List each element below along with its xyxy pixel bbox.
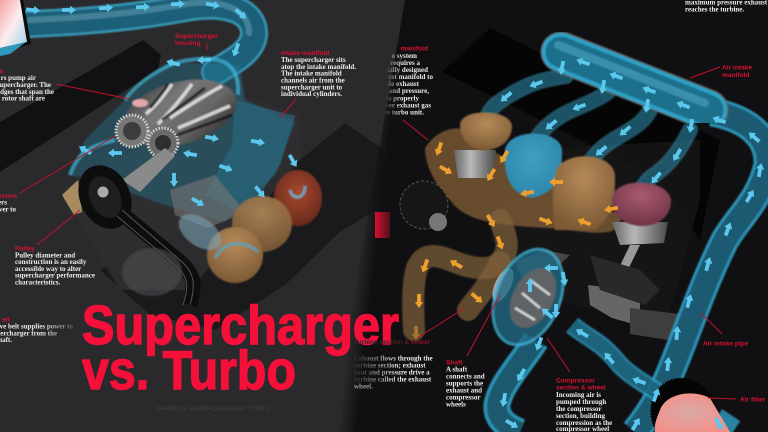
title: Supercharger bbox=[82, 294, 399, 356]
compressor section bbox=[480, 239, 576, 355]
exhaust arrows orange bbox=[412, 141, 619, 340]
text block: top right turbine: reaches the turbine. bbox=[685, 6, 744, 14]
crankshaft bbox=[515, 250, 680, 342]
caption: various supercharger types: VARIOUS SUPERCHARGER TYPES bbox=[156, 406, 270, 412]
panel: turbo engine bbox=[400, 28, 768, 432]
text block: compressor section and wheel: Compressor bbox=[556, 378, 595, 384]
text block: turbine section: turbine section; exhaust bbox=[354, 362, 426, 370]
intake manifold translucent bbox=[70, 62, 295, 222]
text block: drive belt (cropped): elt bbox=[2, 316, 11, 324]
text block: exhaust manifold: cially designed bbox=[384, 66, 428, 74]
text block: drive belt (cropped): ve belt supplies power to bbox=[0, 322, 73, 330]
text block: shaft: exhaust and bbox=[446, 386, 482, 394]
crank and lower parts bbox=[170, 175, 245, 228]
panel: supercharger engine bbox=[0, 0, 384, 330]
supercharger rotors bbox=[116, 68, 244, 158]
text block: shaft bbox=[446, 360, 485, 408]
manifold box bbox=[205, 100, 295, 215]
text block: shaft: wheels bbox=[446, 400, 466, 408]
text block: exhaust manifold: manifold bbox=[401, 46, 428, 52]
text block: pulley: construction is an easily bbox=[15, 258, 87, 266]
manifold cyan edge bbox=[70, 59, 238, 175]
airflow arrows bbox=[26, 0, 300, 209]
text block: pulley bbox=[15, 246, 95, 286]
text block: exhaust manifold: requires a bbox=[390, 59, 420, 67]
text block: exhaust manifold: he turbo unit. bbox=[383, 108, 424, 116]
text block: pulley: characteristics. bbox=[15, 278, 61, 286]
text block: rotors (cropped): rotor shaft are bbox=[2, 94, 45, 102]
exhaust manifold translucent bbox=[425, 128, 621, 233]
text block: pulley: accessible way to alter bbox=[15, 265, 81, 273]
title bbox=[82, 294, 399, 401]
drive belt bbox=[117, 210, 193, 305]
title: vs. Turbo bbox=[82, 339, 296, 401]
cylinders bbox=[460, 112, 671, 230]
text block: exhaust manifold: ust manifold to bbox=[388, 73, 433, 81]
label: air filter: Air filter bbox=[740, 396, 766, 404]
text block: exhaust manifold: and pressure, bbox=[389, 87, 429, 95]
cylinders bbox=[172, 170, 322, 283]
text block: compressor section and wheel: compression as the bbox=[556, 419, 612, 427]
air filter left bbox=[0, 0, 31, 56]
black block right bbox=[100, 123, 384, 330]
piston and rod bbox=[612, 222, 668, 282]
text block: intake manifold: atop the intake manifold. bbox=[281, 63, 356, 71]
text block: exhaust manifold bbox=[383, 46, 433, 116]
silver piston bbox=[454, 150, 496, 178]
text block: turbine section bbox=[354, 339, 433, 390]
text block: exhaust manifold: ile exhaust bbox=[387, 80, 420, 88]
intake runners bbox=[488, 76, 690, 195]
pulley bbox=[62, 157, 142, 237]
text block: pulley: Pulley bbox=[15, 246, 35, 252]
text block: pulley: Pulley diameter and bbox=[15, 252, 75, 260]
text block: drive belt (cropped) bbox=[0, 316, 73, 344]
text block: intake manifold: The supercharger sits bbox=[281, 56, 346, 64]
black valve cover upper left bbox=[0, 40, 161, 172]
leader lines bbox=[20, 43, 736, 399]
air pipe top bbox=[30, 3, 254, 72]
label: air intake pipe: Air intake pipe bbox=[703, 340, 749, 348]
text block: shaft: connects and bbox=[446, 372, 485, 380]
exhaust pipe bbox=[413, 220, 507, 330]
timing gears bbox=[116, 115, 178, 158]
text block: intake manifold: supercharger unit to bbox=[281, 84, 343, 92]
drive shaft bbox=[122, 148, 175, 192]
text block: exhaust manifold: ver exhaust gas bbox=[385, 102, 431, 110]
text block: exhaust manifold: o system bbox=[392, 52, 417, 60]
text block: turbine section: heat and pressure drive a bbox=[354, 368, 430, 376]
text block: turbine section: turbine called the exhaust bbox=[354, 376, 432, 384]
label: supercharger housing: Supercharger bbox=[175, 33, 218, 40]
text block: top right turbine bbox=[685, 0, 768, 14]
text block: compressor section and wheel: Incoming air is bbox=[556, 391, 601, 399]
text block: intake manifold: The intake manifold bbox=[281, 70, 342, 78]
text block: exhaust manifold: to properly bbox=[385, 94, 419, 102]
text block: intake manifold: Intake manifold bbox=[281, 50, 329, 57]
panel: turbo background bbox=[330, 0, 768, 432]
engine block columns bbox=[490, 140, 700, 330]
text block: turbine section: Exhaust flows through the bbox=[354, 354, 433, 362]
text block: shaft: supports the bbox=[446, 380, 483, 388]
label: supercharger housing: housing bbox=[175, 40, 201, 47]
crankshaft pulley bbox=[400, 181, 448, 231]
turbine housing silver bbox=[488, 265, 518, 305]
text block: turbine section: wheel. bbox=[354, 382, 373, 390]
text block: rotors (cropped) bbox=[0, 68, 54, 102]
label: supercharger housing bbox=[175, 33, 218, 47]
text block: compressor section and wheel: section, building bbox=[556, 412, 606, 420]
text block: turbine section: Turbine section & wheel bbox=[354, 339, 430, 346]
label: air intake manifold: Air intake bbox=[722, 64, 752, 72]
air intake manifold tube bbox=[558, 45, 708, 110]
text block: compressor section and wheel bbox=[556, 378, 612, 432]
lower grey pulley bbox=[122, 248, 182, 296]
text block: intake manifold bbox=[281, 50, 356, 98]
text block: compressor section and wheel: section & wheel bbox=[556, 384, 606, 392]
text block: compressor section and wheel: the compressor bbox=[556, 405, 602, 413]
text block: compressor section and wheel: pumped through bbox=[556, 398, 606, 406]
airflow arrows blue bbox=[498, 56, 765, 432]
air pipes bbox=[497, 112, 768, 432]
text block: intake manifold: channels air from the bbox=[281, 76, 345, 84]
text block: intake manifold: individual cylinders. bbox=[281, 90, 342, 98]
text block: gear system (cropped) bbox=[0, 193, 17, 214]
text block: shaft: compressor bbox=[446, 394, 480, 402]
text block: rotors (cropped): dges that span the bbox=[0, 88, 54, 96]
label: air intake manifold: manifold bbox=[722, 72, 749, 79]
label: air intake manifold bbox=[722, 64, 752, 79]
text block: shaft: A shaft bbox=[446, 366, 468, 374]
text block: shaft: Shaft bbox=[446, 360, 463, 366]
red tab bbox=[375, 212, 390, 238]
text block: pulley: supercharger performance bbox=[15, 272, 95, 280]
text block: rotors (cropped): rs pump air bbox=[1, 74, 36, 82]
engine block faint body bbox=[60, 95, 300, 290]
air filter pink bbox=[640, 368, 730, 432]
black valve cover bbox=[442, 28, 720, 240]
